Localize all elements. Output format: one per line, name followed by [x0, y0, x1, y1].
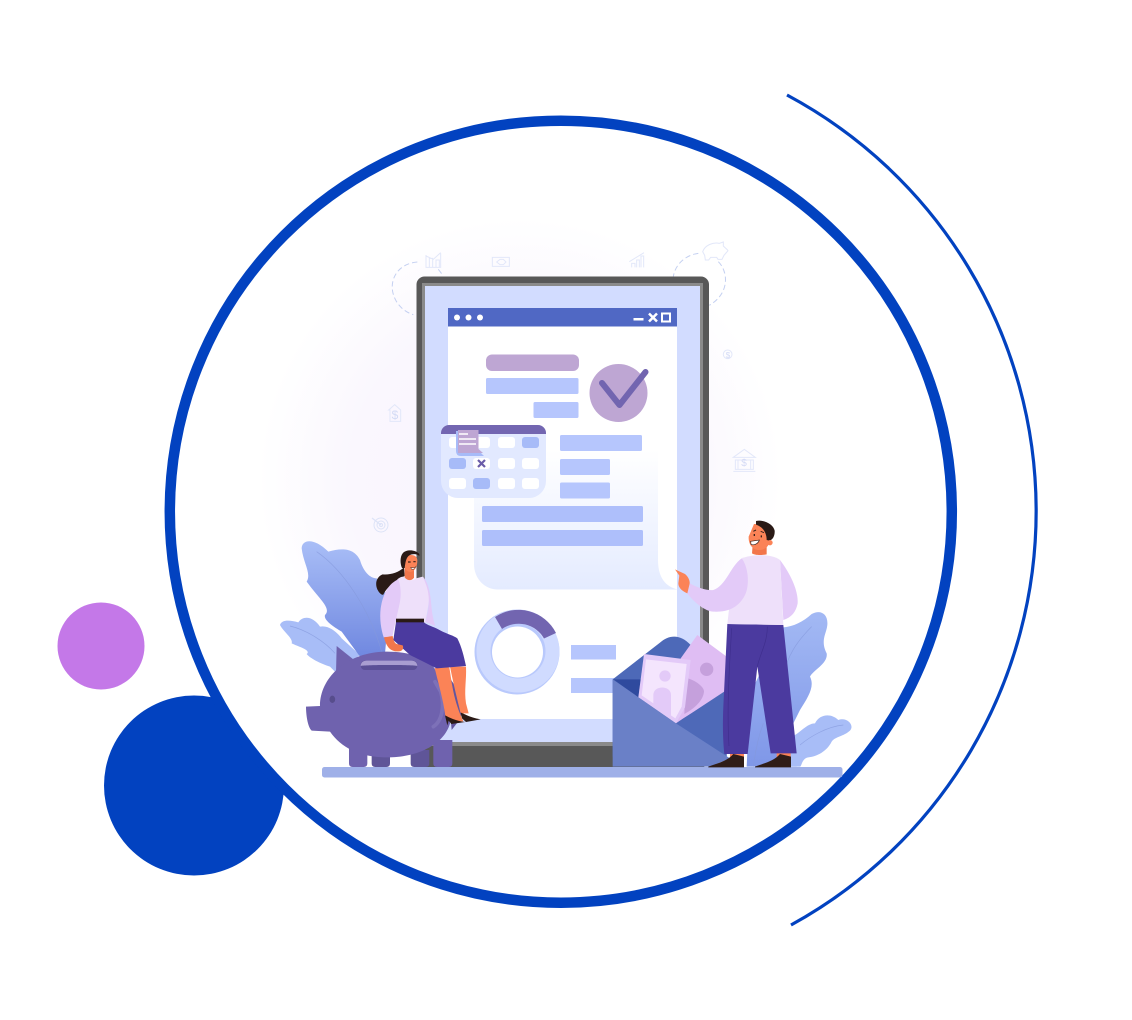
dashed orbit right — [673, 253, 725, 305]
icon: rising bars — [629, 253, 644, 267]
pig near legs — [349, 740, 452, 767]
form bars — [482, 354, 643, 693]
pig coin slot — [361, 661, 417, 670]
left plants — [280, 541, 390, 673]
skirt — [393, 622, 466, 668]
icon: target rings — [372, 518, 388, 532]
icon: dollar coin — [723, 350, 732, 359]
faint background icons — [389, 242, 755, 471]
left sleeve — [380, 579, 401, 637]
hair — [401, 550, 419, 568]
ankles — [730, 752, 791, 758]
face details — [753, 530, 764, 533]
pig ear — [336, 646, 353, 673]
main blue ring — [170, 121, 952, 903]
base platform — [322, 767, 842, 778]
tablet bezel highlight — [422, 283, 703, 746]
donut chart — [474, 610, 560, 694]
leaf: tall right — [747, 612, 827, 767]
approval check badge — [590, 364, 648, 422]
envelope right panel — [676, 690, 727, 758]
shoes — [708, 754, 791, 767]
leaf: small — [280, 618, 360, 673]
tablet body — [416, 276, 709, 768]
right plants — [747, 612, 852, 767]
purple decorative circle — [58, 602, 144, 690]
pig body — [306, 652, 450, 757]
outer blue arc — [787, 95, 1036, 925]
back banknote — [676, 635, 727, 723]
neck — [405, 567, 414, 580]
envelope inner shadow — [613, 679, 641, 697]
torso — [394, 577, 429, 623]
document sheet — [474, 450, 678, 590]
icon: bank — [733, 449, 755, 471]
head — [749, 524, 770, 550]
leaf: small right — [787, 715, 852, 767]
belt — [396, 619, 424, 622]
leaf: large — [302, 541, 390, 657]
large blue decorative circle — [104, 696, 284, 876]
front banknote — [638, 654, 691, 723]
far leg — [450, 667, 469, 713]
app window — [448, 308, 677, 719]
shoes — [445, 713, 481, 725]
tablet screen — [425, 286, 700, 742]
trousers — [723, 624, 797, 754]
torso — [727, 555, 783, 625]
hand on pig — [384, 636, 403, 651]
right sleeve — [780, 560, 798, 620]
icon: bar chart left — [426, 253, 441, 267]
pig eye — [329, 696, 335, 703]
icon: piggy outline — [703, 242, 728, 260]
left arm sleeve — [687, 558, 748, 612]
leaf veins — [290, 552, 382, 653]
pig far side — [447, 673, 462, 730]
pig far legs — [372, 750, 429, 767]
head — [403, 555, 417, 572]
calendar card — [441, 425, 546, 498]
trouser seams — [728, 627, 767, 746]
hair — [756, 521, 775, 541]
pig body highlight — [433, 682, 443, 727]
woman smile — [411, 567, 416, 569]
envelope back flap — [613, 637, 727, 757]
woman sitting on piggy bank — [376, 550, 481, 725]
ponytail — [376, 567, 405, 595]
pointing hand — [675, 569, 690, 593]
smile — [751, 540, 759, 545]
eyes — [754, 534, 761, 537]
money envelope — [613, 635, 730, 767]
tablet device — [416, 276, 709, 768]
icon: dollar signs: $ — [726, 351, 731, 360]
neck — [752, 545, 767, 555]
man pointing — [675, 521, 798, 767]
icon: dollar signs — [392, 351, 747, 469]
envelope left panel — [613, 679, 730, 767]
right sleeve — [423, 577, 435, 626]
dashed orbit left — [392, 262, 443, 315]
leaf veins right — [753, 627, 843, 767]
piggy bank — [306, 646, 462, 767]
icon: dollar signs: $ — [392, 408, 399, 422]
background glow — [258, 218, 782, 742]
window title bar — [448, 308, 677, 326]
face details — [408, 560, 416, 564]
icon: dollar house — [389, 405, 401, 421]
ear — [767, 540, 773, 545]
near leg — [435, 667, 463, 721]
icon: dollar signs: $ — [741, 458, 747, 469]
icon: banknote — [492, 257, 509, 266]
